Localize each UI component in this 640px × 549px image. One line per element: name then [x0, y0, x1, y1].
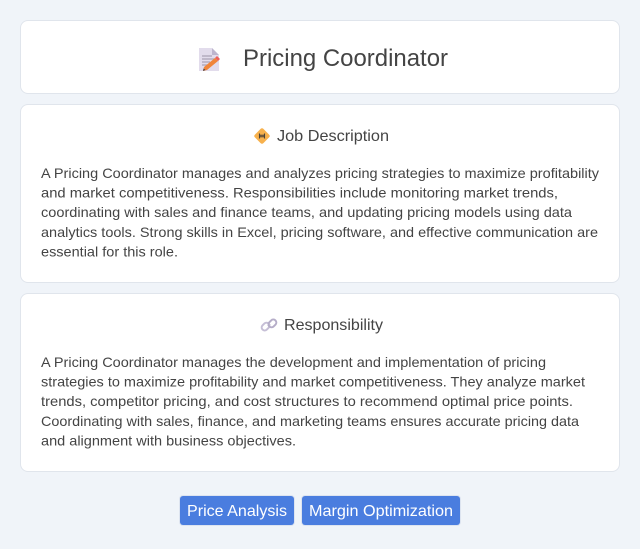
- heading: job description: Job Description: [277, 128, 389, 145]
- text block: job description: essential for this role.: [41, 243, 178, 259]
- tag: price analysis: [180, 496, 294, 525]
- heading: responsibility: Responsibility: [284, 317, 383, 334]
- text block: job description: coordinating with sales and finance teams, and updating pricing models using data: [41, 204, 572, 220]
- text block: responsibility: Coordinating with sales, finance, and marketing teams ensures accurate pricing data: [41, 413, 579, 429]
- text block: responsibility: [41, 354, 585, 448]
- text block: responsibility: trends, competitor pricing, and cost structures to recommend optimal price points.: [41, 393, 573, 409]
- icon: document with pencil: [199, 48, 220, 71]
- text block: job description: A Pricing Coordinator manages and analyzes pricing strategies to maximize profitability: [41, 165, 599, 181]
- tag: margin optimization: [302, 496, 460, 525]
- text block: job description: [41, 165, 599, 259]
- text block: responsibility: and alignment with business objectives.: [41, 432, 296, 448]
- text block: responsibility: A Pricing Coordinator manages the development and implementation of pricing: [41, 354, 546, 370]
- icon: chain link: [260, 318, 278, 332]
- text block: job description: analytics tools. Strong skills in Excel, pricing software, and effective communication are: [41, 224, 598, 240]
- title: Pricing Coordinator: [243, 45, 448, 72]
- panel: header: [20, 20, 620, 94]
- text block: job description: and market competitiveness. Responsibilities include monitoring market trends,: [41, 185, 558, 201]
- panel: job description: [20, 104, 620, 283]
- icon: diamond sign: [254, 128, 270, 144]
- tag: price analysis: Price Analysis: [187, 503, 287, 520]
- panel: responsibility: [20, 293, 620, 472]
- text block: responsibility: strategies to maximize profitability and market competitiveness. They analyze market: [41, 374, 585, 390]
- tag: margin optimization: Margin Optimization: [309, 503, 453, 520]
